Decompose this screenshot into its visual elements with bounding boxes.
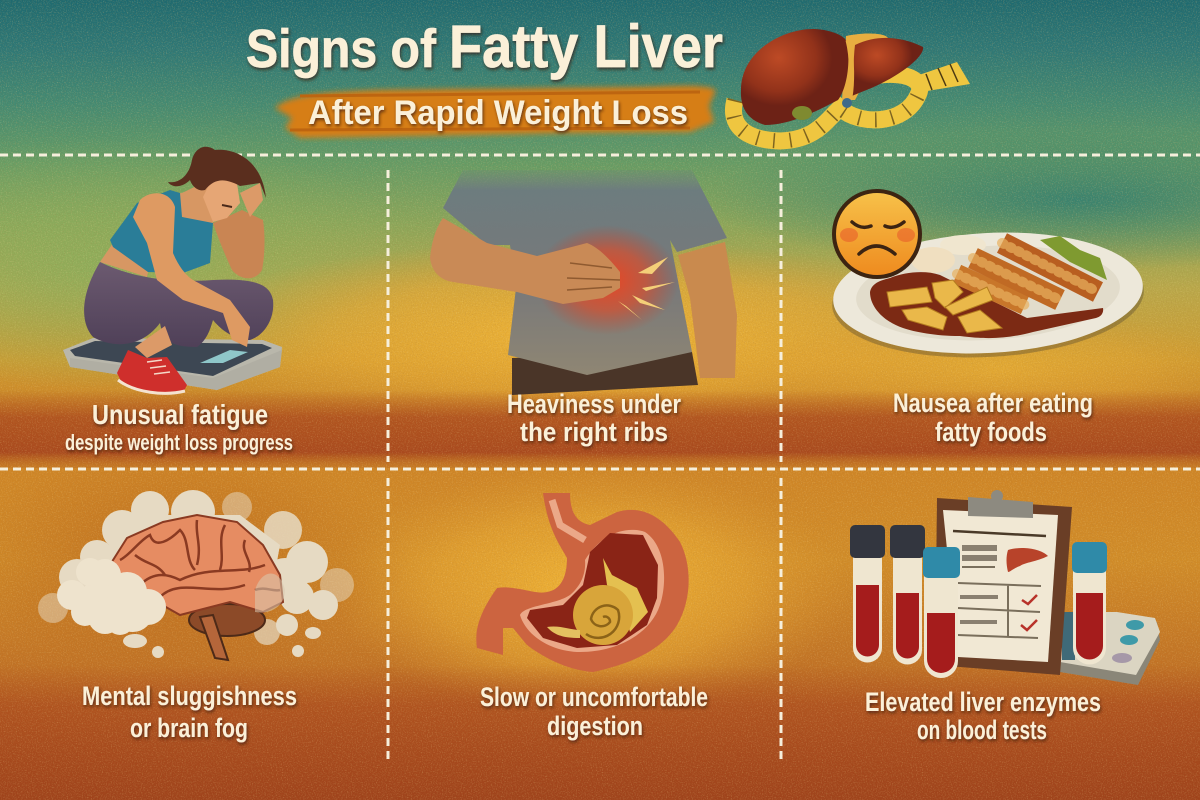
caption: brain fog: Mental sluggishness xyxy=(82,681,297,711)
panel: heaviness under ribs xyxy=(430,170,737,447)
panel: blood tests xyxy=(850,490,1160,745)
caption: blood tests: Elevated liver enzymes xyxy=(865,687,1101,717)
caption: heaviness: Heaviness under xyxy=(507,389,681,419)
caption: brain fog: or brain fog xyxy=(130,713,248,743)
caption: nausea: fatty foods xyxy=(935,417,1047,447)
panel: nausea xyxy=(829,191,1147,447)
caption: digestion: Slow or uncomfortable xyxy=(480,682,708,712)
panel: brain fog xyxy=(38,490,354,743)
subtitle banner: After Rapid Weight Loss xyxy=(308,94,688,132)
caption: nausea: Nausea after eating xyxy=(893,388,1093,418)
icon: sad face xyxy=(834,191,920,277)
caption: fatigue xyxy=(65,399,293,455)
icon: stomach xyxy=(476,493,689,672)
panel: unusual fatigue xyxy=(63,147,293,455)
caption: blood tests: on blood tests xyxy=(917,715,1047,745)
panel: digestion xyxy=(476,493,708,741)
icon: fog cloud xyxy=(38,490,354,658)
icon: blood test tubes xyxy=(850,525,1107,678)
title: Fatty Liver xyxy=(449,13,723,80)
caption: heaviness xyxy=(507,389,681,447)
icon: clipboard xyxy=(935,490,1072,675)
caption: blood tests xyxy=(865,687,1101,745)
icon: brain xyxy=(108,515,283,660)
caption: nausea xyxy=(893,388,1093,447)
caption: heaviness: the right ribs xyxy=(520,417,668,447)
caption: digestion: digestion xyxy=(547,711,643,741)
icon: plate of fatty food xyxy=(829,225,1147,365)
caption: fatigue: despite weight loss progress xyxy=(65,430,293,455)
icon: liver with measuring tape xyxy=(733,29,970,141)
caption: fatigue: Unusual fatigue xyxy=(92,399,268,430)
title xyxy=(246,13,723,80)
subtitle banner xyxy=(275,86,716,138)
icon: torso xyxy=(430,170,737,395)
icon: medical device xyxy=(1060,612,1160,685)
icon: fog in front of brain xyxy=(57,558,285,635)
title: Signs of xyxy=(246,19,437,79)
caption: brain fog xyxy=(82,681,297,743)
icon: woman sitting xyxy=(84,147,273,393)
caption: digestion xyxy=(480,682,708,741)
dashed dividers xyxy=(0,155,1200,760)
icon: bathroom scale xyxy=(63,338,282,390)
